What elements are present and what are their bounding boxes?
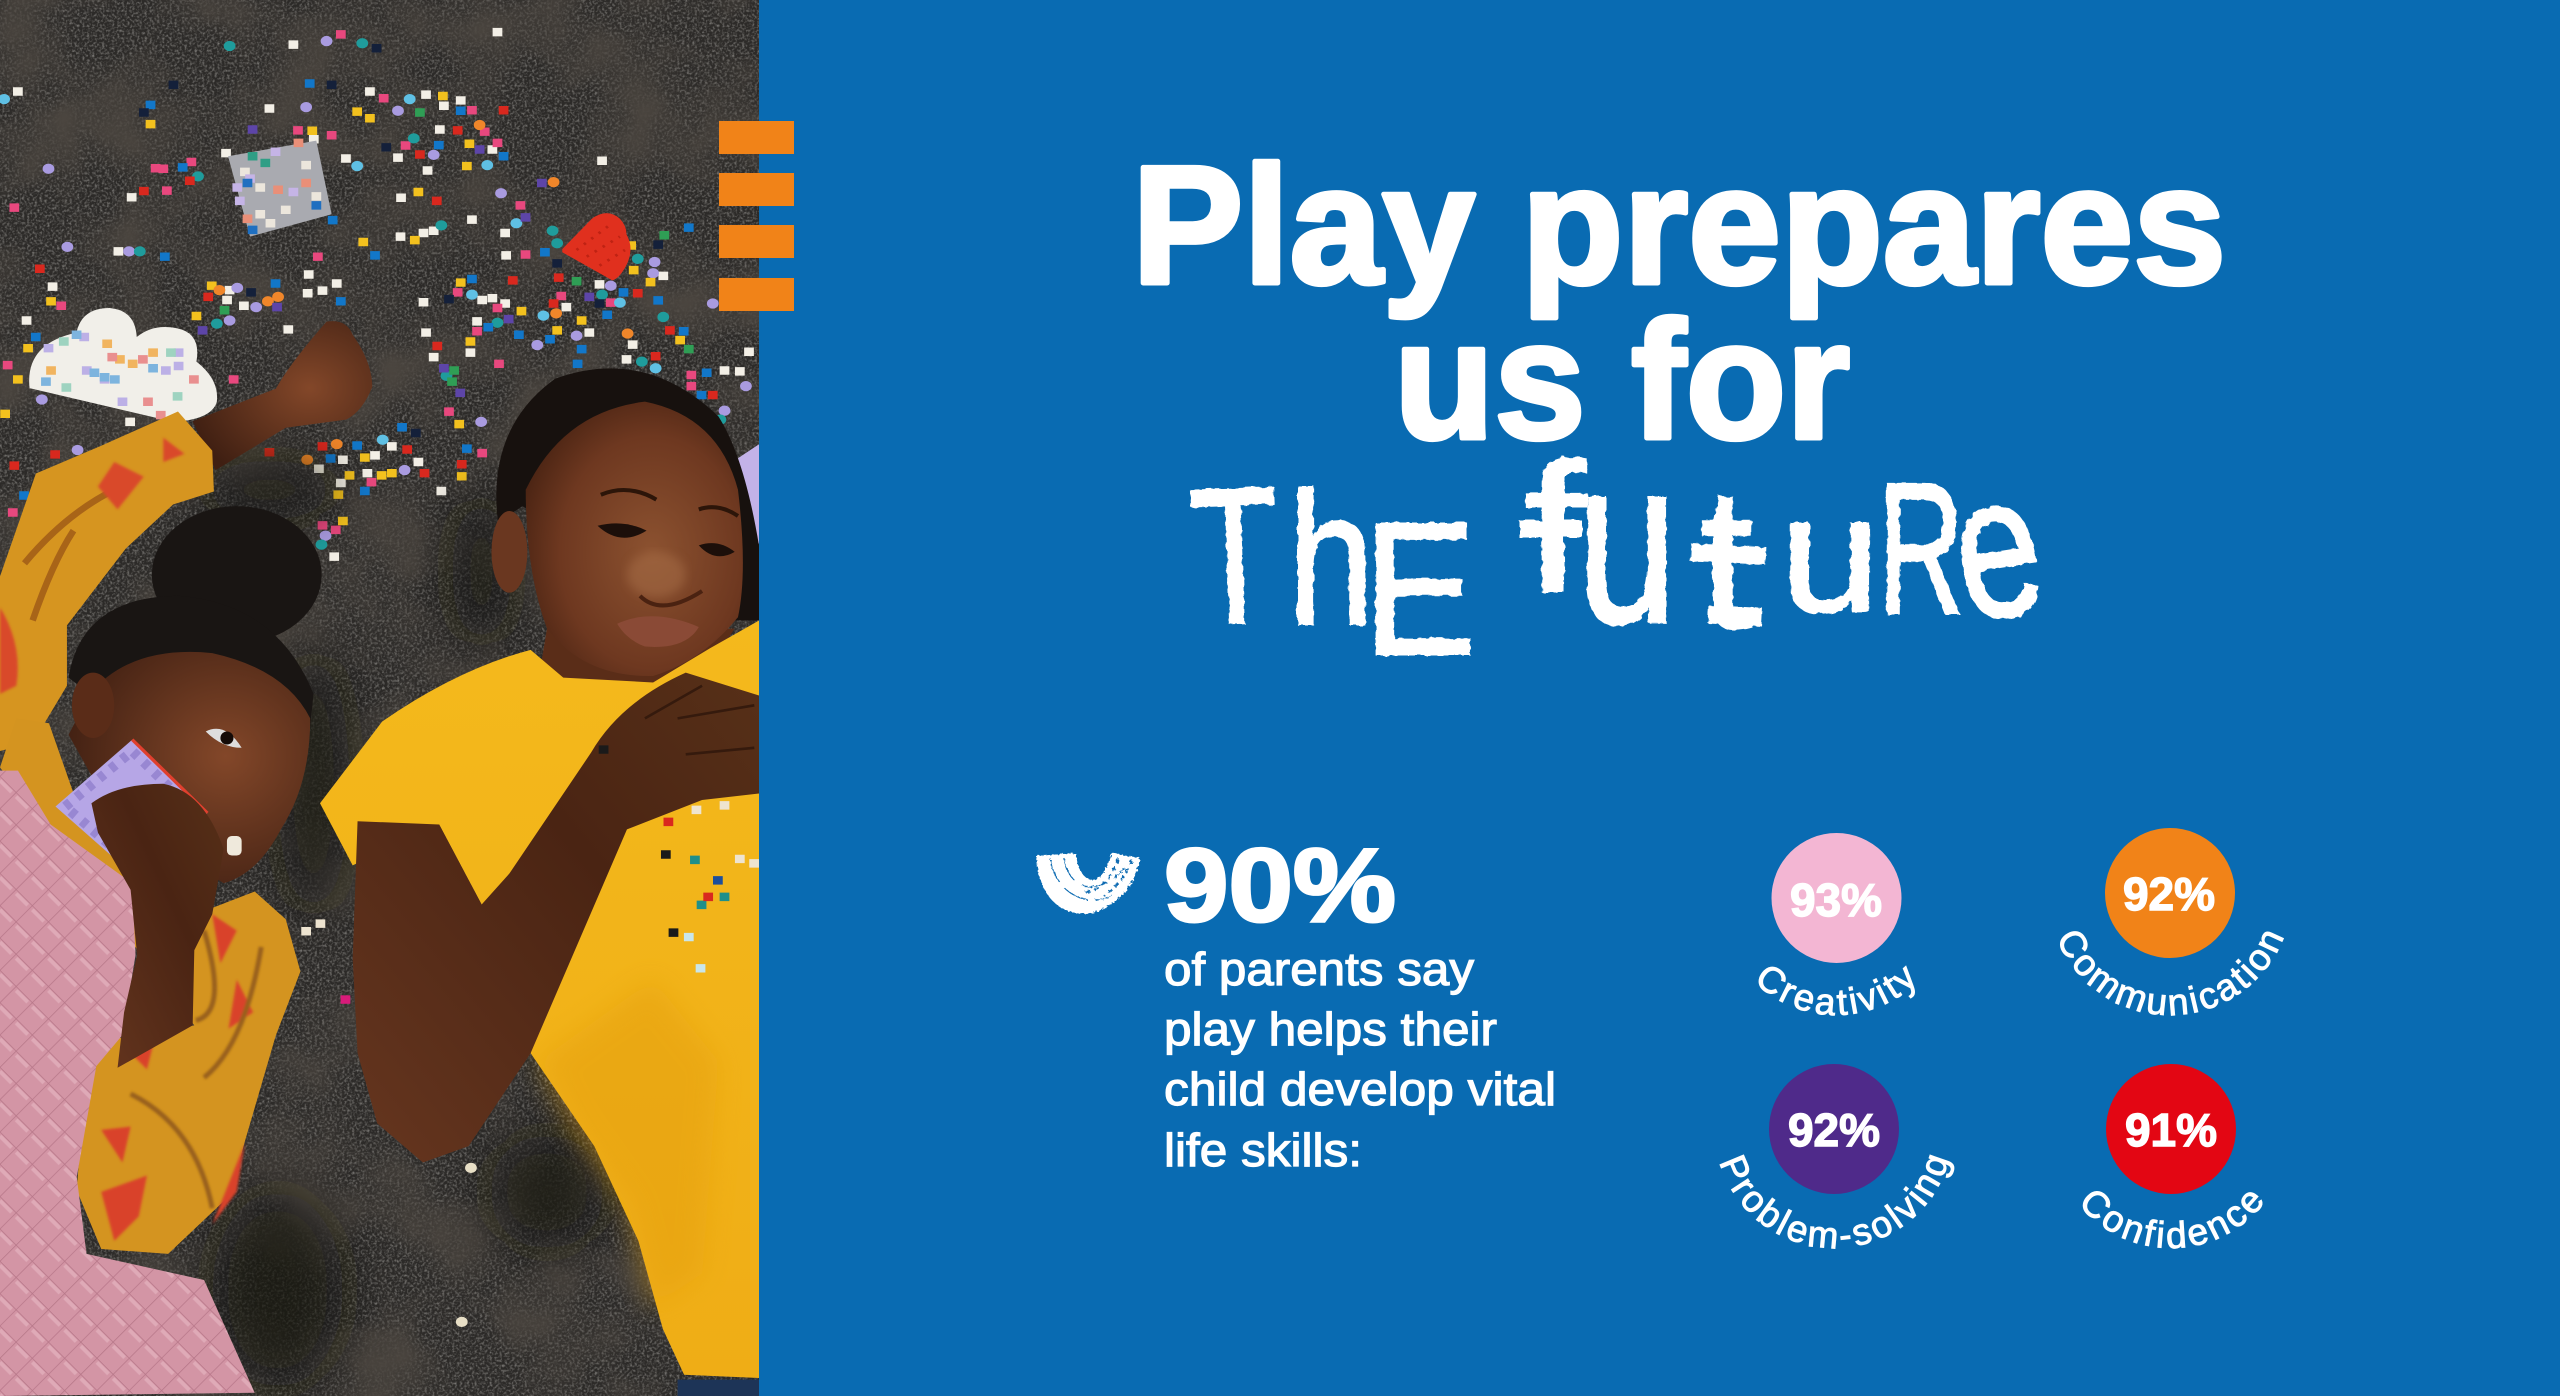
title: hand-lettered The future: R [1878,445,1964,654]
skill badge: Confidence 91%: Confidence [2082,1191,2262,1249]
LEGO pieces on shirt and lower carpet [306,750,754,1322]
stat description: child develop vital [1164,1063,1556,1115]
big stat 90%: 90% [1164,828,1396,944]
skill badge: Problem-solving 92%: 92% [1788,1104,1880,1156]
boy arm and hand [353,673,759,1162]
boy lips [617,616,699,647]
girl hair [69,506,322,727]
orange stripe marks [719,121,794,311]
girl shirt and collar [0,718,300,1254]
title: hand-lettered The future [1187,411,2056,695]
skill badge: Problem-solving 92% [1719,1064,1954,1249]
photo: two children lying on a carpet with LEGO pieces [0,0,759,1396]
boy eyebrows [601,490,738,516]
pink quilted jacket [0,771,255,1396]
boy left eye [598,523,647,538]
girl eye [206,729,242,748]
stat description: life skills: [1164,1124,1362,1176]
girl figure [0,321,372,1396]
girl face [69,652,310,883]
boy hair [496,368,759,620]
skill badge: Problem-solving 92%: Problem-solving [1719,1154,1954,1249]
title: Play prepares us for [1132,131,2226,474]
scattered LEGO pieces [4,32,749,557]
boy figure [320,368,759,1396]
boy yellow t-shirt [320,620,759,1378]
shirt shading [539,980,718,1306]
boy jeans [678,1380,759,1396]
skill badge: Communication 92%: Communication [2060,931,2284,1016]
skill badge: Creativity 93%: 93% [1790,874,1882,926]
title: hand-lettered The future: h [1288,453,1374,664]
girl floral sleeve [0,411,214,751]
boy neck [542,628,734,682]
stat description [1164,943,1556,1176]
icon: white brush stroke smile [1036,853,1140,914]
white cloud plate with tiles [29,308,217,422]
title: hand-lettered The future: T [1187,448,1282,666]
title: hand-lettered The future: u [1780,462,1880,646]
title: hand-lettered The future: f [1524,425,1586,630]
title: hand-lettered The future: t [1700,447,1753,670]
lilac plate held by girl [56,740,208,856]
boy ear [491,511,527,593]
girl ear [72,673,114,738]
girl raised arm [193,321,372,470]
title: Play prepares us for: us for [1394,286,1850,474]
skill badge: Communication 92% [2060,828,2284,1016]
boy face highlight [627,552,686,598]
title: hand-lettered The future: E [1363,484,1476,695]
stat description: of parents say [1164,943,1474,995]
carpet [0,0,759,1396]
red heart plate [562,213,631,280]
title: hand-lettered The future: u [1577,411,1677,673]
boy nose [640,591,702,605]
boy right eye [699,543,735,556]
skill badge: Confidence 91%: 91% [2125,1104,2217,1156]
skill badge: Creativity 93%: Creativity [1758,965,1915,1016]
stat description: play helps their [1164,1003,1497,1055]
lilac plate behind boy [738,444,759,544]
skill badge: Confidence 91% [2082,1064,2262,1249]
dark shadows around children [204,460,604,1388]
skill badge: Communication 92%: 92% [2123,868,2215,920]
title: hand-lettered The future: e [1937,428,2056,664]
girl hand and forearm [91,784,224,1068]
title: Play prepares us for: Play prepares [1132,131,2226,319]
grey square plate with tiles [228,141,332,237]
skill badge: Creativity 93% [1758,833,1915,1016]
girl tooth [227,836,242,856]
floral marks on shirt [101,914,261,1241]
boy face [526,402,743,676]
boy finger lines [645,686,754,754]
